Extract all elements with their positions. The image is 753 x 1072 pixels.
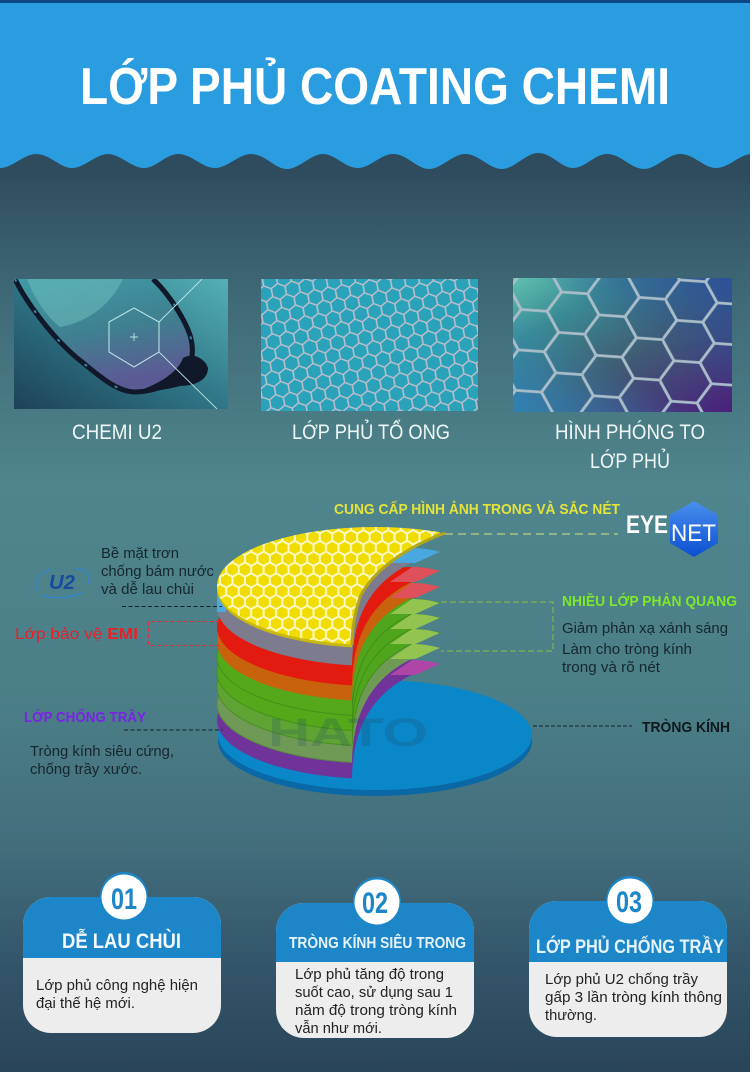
panel: honeycomb coating photo: [261, 279, 478, 411]
icon: Eye Net logo: [626, 501, 718, 557]
caption: enlarged coating: [555, 421, 705, 473]
callout: EMI protection: [15, 622, 220, 646]
callout: multiple anti-reflective layers: NHIỀU LỚP PHẢN QUANG: [562, 592, 737, 610]
callout: lens: TRÒNG KÍNH: [642, 718, 730, 736]
body text: [295, 967, 457, 1037]
callout: smooth surface: Bề mặt trơn: [101, 546, 179, 562]
icon: Eye Net logo: NET: [671, 520, 716, 547]
callout: scratch resistant layer: chống trầy xước.: [30, 762, 142, 778]
caption: honeycomb coating: LỚP PHỦ TỔ ONG: [292, 420, 450, 444]
body text: [545, 972, 722, 1024]
callout: multiple anti-reflective layers: trong và rõ nét: [562, 660, 660, 676]
badge 02: [353, 877, 401, 925]
icon: U2 logo: [36, 569, 89, 598]
callout: scratch resistant layer: LỚP CHỐNG TRẦY: [24, 708, 146, 726]
badge 03: [606, 876, 654, 924]
panel: card 03: [529, 876, 727, 1037]
icon: Eye Net logo: EYE: [626, 511, 668, 539]
body text: suốt cao, sử dụng sau 1: [295, 985, 453, 1001]
chart: lens layer stack: [217, 527, 533, 796]
body text: Lớp phủ tăng độ trong: [295, 967, 444, 983]
header banner: [0, 0, 750, 169]
callout: scratch resistant layer: Tròng kính siêu cứng,: [30, 744, 174, 760]
body text: [36, 978, 198, 1012]
badge 01: 01: [111, 883, 137, 916]
callout: EMI protection: Lớp bảo vệ EMI: [15, 626, 138, 643]
watermark HATO: HATO: [268, 711, 428, 755]
body text: vẫn như mới.: [295, 1020, 382, 1037]
callout: multiple anti-reflective layers: [441, 592, 737, 676]
callout: clear image: CUNG CẤP HÌNH ẢNH TRONG VÀ SẮC NÉT: [334, 500, 620, 518]
title: LỚP PHỦ COATING CHEMI: [80, 57, 670, 116]
heading: DỄ LAU CHÙI: [62, 929, 181, 953]
panel: Chemi U2 lens photo: [14, 279, 228, 409]
body text: gấp 3 lần tròng kính thông: [545, 990, 722, 1006]
body text: Lớp phủ U2 chống trầy: [545, 972, 699, 988]
coating layers: [216, 527, 446, 778]
callout: multiple anti-reflective layers: Làm cho tròng kính: [562, 642, 692, 658]
badge 02: 02: [362, 887, 388, 920]
callout: smooth surface: [101, 546, 222, 606]
body text: đại thế hệ mới.: [36, 996, 135, 1012]
lens disk: [218, 680, 532, 796]
heading: TRÒNG KÍNH SIÊU TRONG: [289, 933, 466, 952]
body text: năm độ trong tròng kính: [295, 1003, 457, 1019]
heading: LỚP PHỦ CHỐNG TRẦY: [536, 936, 724, 958]
caption: enlarged coating: LỚP PHỦ: [590, 449, 670, 473]
caption: Chemi U2: CHEMI U2: [72, 421, 162, 444]
caption: enlarged coating: HÌNH PHÓNG TO: [555, 421, 705, 444]
callout: smooth surface: chống bám nước: [101, 564, 214, 580]
badge 03: 03: [616, 886, 642, 919]
icon: U2 logo: U2: [49, 572, 75, 594]
body text: Lớp phủ công nghệ hiện: [36, 978, 198, 994]
body text: thường.: [545, 1008, 597, 1024]
callout: multiple anti-reflective layers: Giảm phản xạ xánh sáng: [562, 621, 728, 637]
panel: card 02: [276, 877, 474, 1038]
panel: enlarged coating photo: [513, 278, 732, 412]
callout: smooth surface: và dễ lau chùi: [101, 581, 194, 598]
badge 01: [100, 872, 148, 920]
panel: card 01: [23, 872, 221, 1033]
callout: scratch resistant layer: [24, 708, 223, 778]
